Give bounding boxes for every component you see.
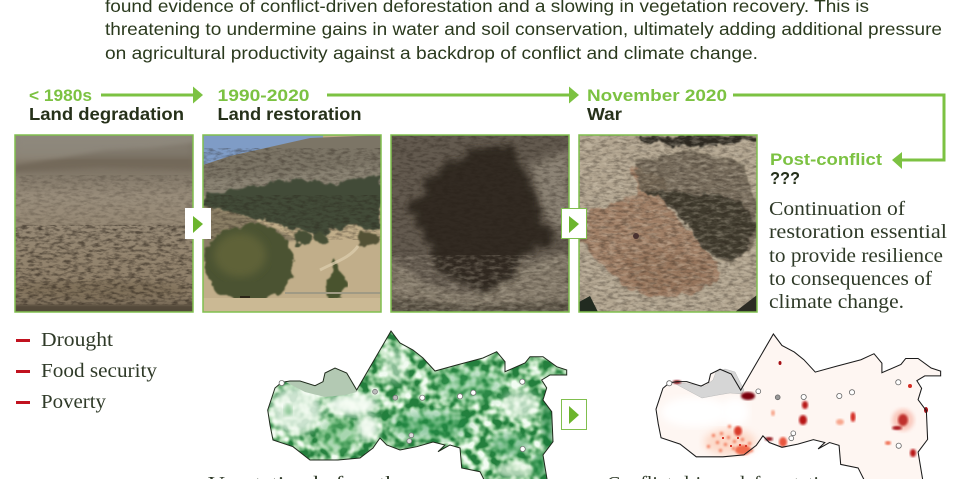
arrow: 1980s to 1990 (101, 86, 203, 104)
photo frame: land degradation (15, 135, 193, 312)
timeline label: war (587, 86, 727, 124)
timeline label: war: War (587, 104, 622, 124)
timeline label: war: November 2020 (587, 86, 727, 105)
timeline label: land degradation: Land degradation (29, 104, 184, 124)
arrow: war to post-conflict (733, 95, 944, 169)
map: vegetation recovery (260, 325, 570, 479)
timeline label: land restoration: Land restoration (218, 104, 362, 124)
photo: satellite after war (579, 135, 757, 312)
intro text: on agricultural productivity against a backdrop of conflict and climate change. (105, 43, 758, 63)
intro text (105, 0, 942, 63)
post-conflict heading: ??? (770, 168, 800, 188)
map: conflict-driven deforestation (656, 334, 941, 479)
deforestation hotspots (673, 361, 928, 457)
burned-out grey patch (672, 369, 744, 398)
timeline label: land degradation: < 1980s (29, 86, 92, 105)
photo frame: satellite before war (391, 135, 569, 312)
post-conflict heading (770, 150, 882, 188)
arrow box: photo 3 to photo 4 (562, 208, 586, 238)
post-conflict text: Continuation of (769, 199, 906, 220)
timeline label: land restoration: 1990-2020 (218, 86, 310, 105)
post-conflict heading: Post-conflict (770, 150, 882, 169)
arrow box: photo 1 to photo 2 (185, 208, 211, 239)
consequences list (16, 330, 157, 413)
arrow box: between maps (562, 400, 586, 430)
photo frame: satellite after war (579, 135, 757, 312)
consequences list: Drought (41, 330, 114, 351)
post-conflict text: to provide resilience (769, 246, 943, 267)
consequences list: Poverty (41, 392, 106, 413)
photo: satellite before war (391, 135, 569, 312)
post-conflict text: climate change. (769, 292, 904, 313)
photo frame: land restoration (203, 135, 381, 312)
timeline label: land restoration (218, 86, 362, 124)
photo: land degradation (10, 135, 193, 312)
timeline label: land degradation (29, 86, 184, 124)
map sites: vegetation recovery (279, 379, 525, 452)
consequences list: Food security (41, 361, 157, 382)
intro text: threatening to undermine gains in water and soil conservation, ultimately adding additional pressure (105, 19, 942, 39)
map sites: deforestation (667, 380, 901, 448)
post-conflict text (769, 199, 948, 313)
map outline: deforestation (656, 334, 941, 479)
photo: land restoration (203, 135, 381, 312)
post-conflict text: to consequences of (769, 269, 933, 290)
map outline: vegetation recovery (268, 331, 567, 479)
arrow: 2020 to war (327, 86, 579, 104)
post-conflict text: restoration essential (769, 222, 948, 243)
